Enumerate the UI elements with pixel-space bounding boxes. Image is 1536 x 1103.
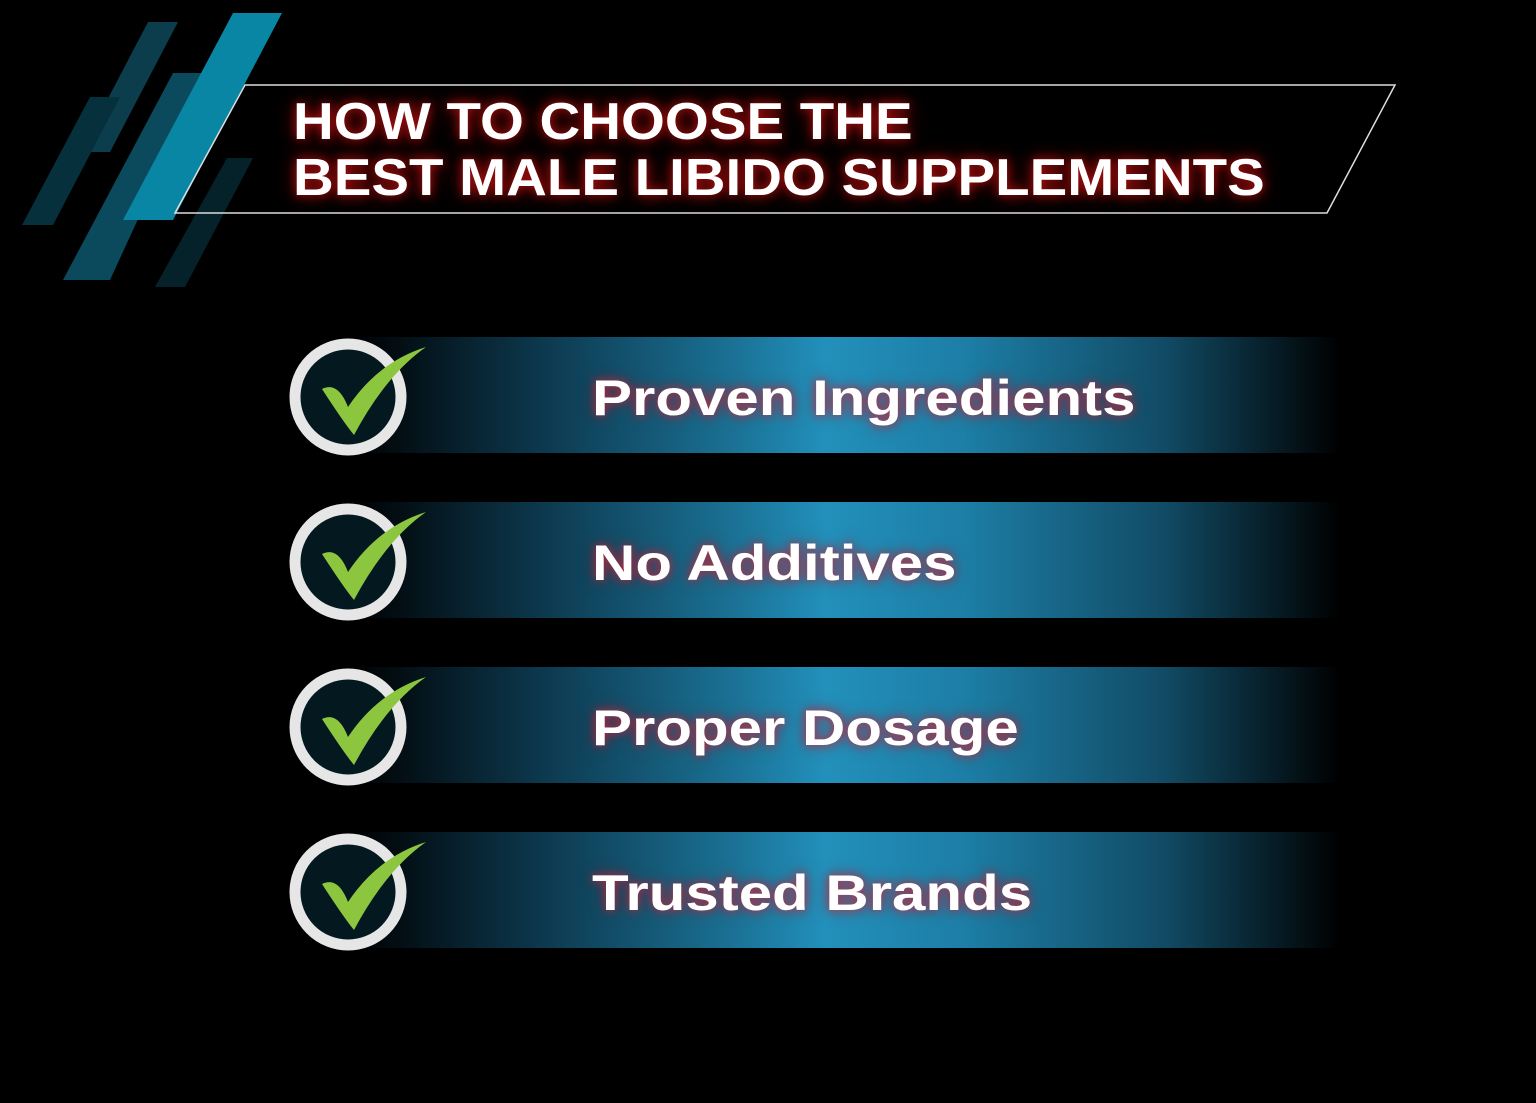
icon: check (290, 668, 426, 786)
title: HOW TO CHOOSE THE (293, 93, 913, 151)
row: Trusted Brands (290, 832, 1326, 950)
row: Trusted Brands: Trusted Brands (592, 865, 1032, 921)
icon: check (290, 834, 426, 950)
row: No Additives: No Additives (592, 535, 956, 591)
row: Proper Dosage: Proper Dosage (592, 700, 1019, 756)
row: No Additives (290, 502, 1326, 620)
title (174, 84, 1396, 214)
row: Proper Dosage (290, 667, 1326, 786)
title: BEST MALE LIBIDO SUPPLEMENTS (293, 149, 1265, 207)
icon: check (290, 338, 426, 456)
row: Proven Ingredients: Proven Ingredients (592, 370, 1135, 426)
decorative stripes (22, 13, 282, 287)
row: Proven Ingredients (290, 337, 1326, 456)
icon: check (290, 504, 426, 620)
